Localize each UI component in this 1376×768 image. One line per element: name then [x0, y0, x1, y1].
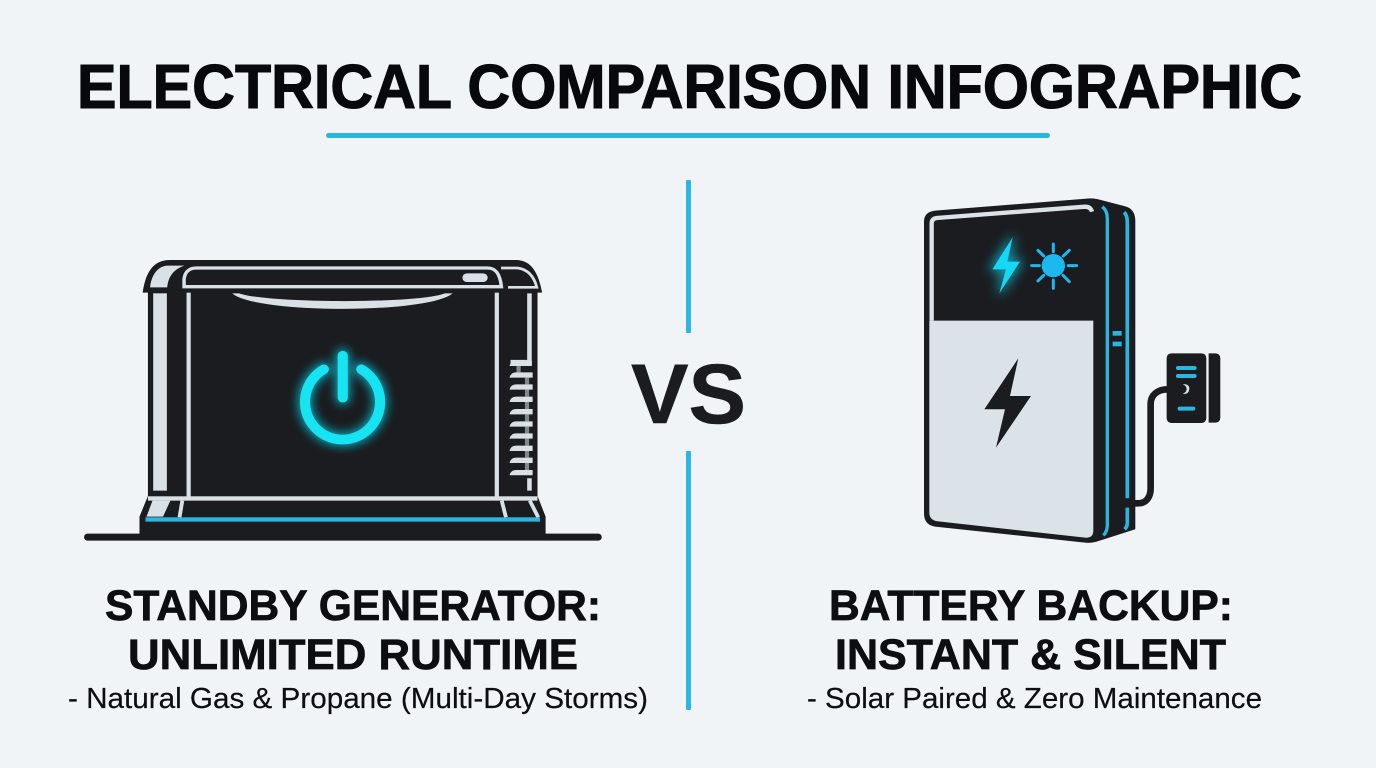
icon: black bolt: [984, 358, 1031, 448]
side indicators: [1113, 331, 1122, 336]
divider: upper: [686, 180, 691, 333]
heading: standby generator: STANDBY GENERATOR:: [105, 582, 601, 630]
generator housing: [139, 260, 546, 537]
icon: cyan bolt: [992, 237, 1020, 293]
power symbol: [305, 356, 380, 440]
left roof highlight: [150, 266, 184, 287]
heading: battery backup: [829, 582, 1233, 679]
cyan base strip: [145, 517, 540, 522]
battery housing: [924, 198, 1135, 543]
title: ELECTRICAL COMPARISON INFOGRAPHIC: [77, 53, 1302, 122]
right side stripe: [511, 293, 529, 491]
lower light panel: [929, 321, 1093, 538]
cyan side stripe: rear: [1124, 212, 1127, 529]
subtext: battery backup: - Solar Paired & Zero Maintenance: [807, 683, 1262, 715]
icon: sun: [1032, 244, 1077, 288]
right roof outline: [501, 268, 537, 287]
heading: standby generator: UNLIMITED RUNTIME: [128, 631, 578, 679]
ground line: [84, 534, 602, 541]
heading: standby generator: [105, 582, 601, 679]
icon: battery backup: [924, 198, 1220, 543]
icon: standby generator: [84, 260, 602, 541]
wall connector: [1167, 353, 1220, 423]
heading: battery backup: INSTANT & SILENT: [835, 631, 1226, 679]
power cable: [1132, 389, 1168, 503]
power symbol glow: [305, 356, 380, 440]
door frame: [187, 293, 191, 497]
bolt glow: [992, 237, 1020, 293]
roof panel outline: [184, 268, 501, 287]
VS label: VS: [631, 347, 746, 441]
title underline: [326, 133, 1050, 138]
roof indicator pill: [462, 273, 488, 282]
heading: battery backup: BATTERY BACKUP:: [829, 582, 1233, 630]
cooling vents: [509, 361, 533, 475]
top highlight and left frame: [932, 207, 1092, 321]
left side panel highlight: [153, 293, 167, 491]
handle crescent: [232, 293, 453, 309]
cyan side stripe: front: [1102, 207, 1107, 535]
divider: lower: [686, 451, 691, 710]
base panel details: [147, 501, 170, 517]
subtext: standby generator: - Natural Gas & Propane (Multi-Day Storms): [68, 683, 648, 715]
